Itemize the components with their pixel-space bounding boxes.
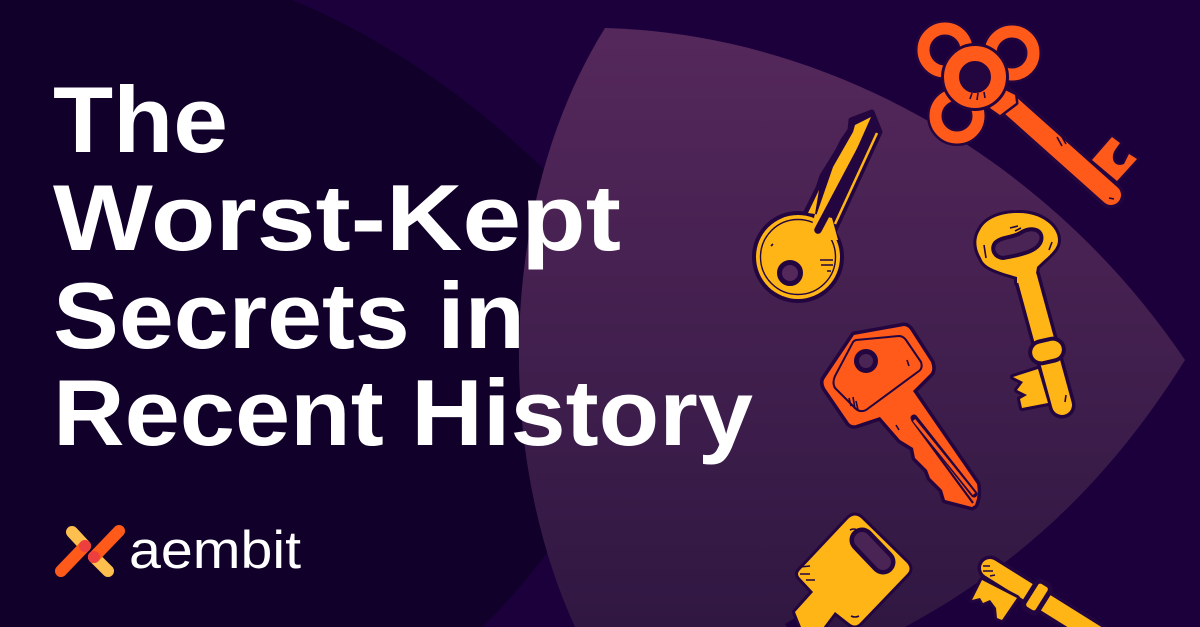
- title: Recent History: [53, 360, 753, 465]
- title: [53, 67, 753, 465]
- title: The: [53, 67, 228, 172]
- icon: yellow key bottom right: [972, 566, 1110, 627]
- icon: yellow square key: [785, 516, 910, 627]
- icon: orange ornate key: [924, 28, 1137, 199]
- logo: aembit: [61, 521, 301, 580]
- icon: yellow bottle-opener key: [976, 213, 1066, 408]
- icon: orange flat key: [824, 326, 978, 507]
- logo mark: [61, 531, 119, 571]
- purple lens shape: [519, 28, 1185, 627]
- logo wordmark: aembit: [129, 521, 301, 580]
- title: Secrets in: [53, 263, 525, 368]
- dark left shape: [0, 0, 560, 627]
- icon: yellow round key: [752, 112, 880, 303]
- title: Worst-Kept: [53, 165, 621, 270]
